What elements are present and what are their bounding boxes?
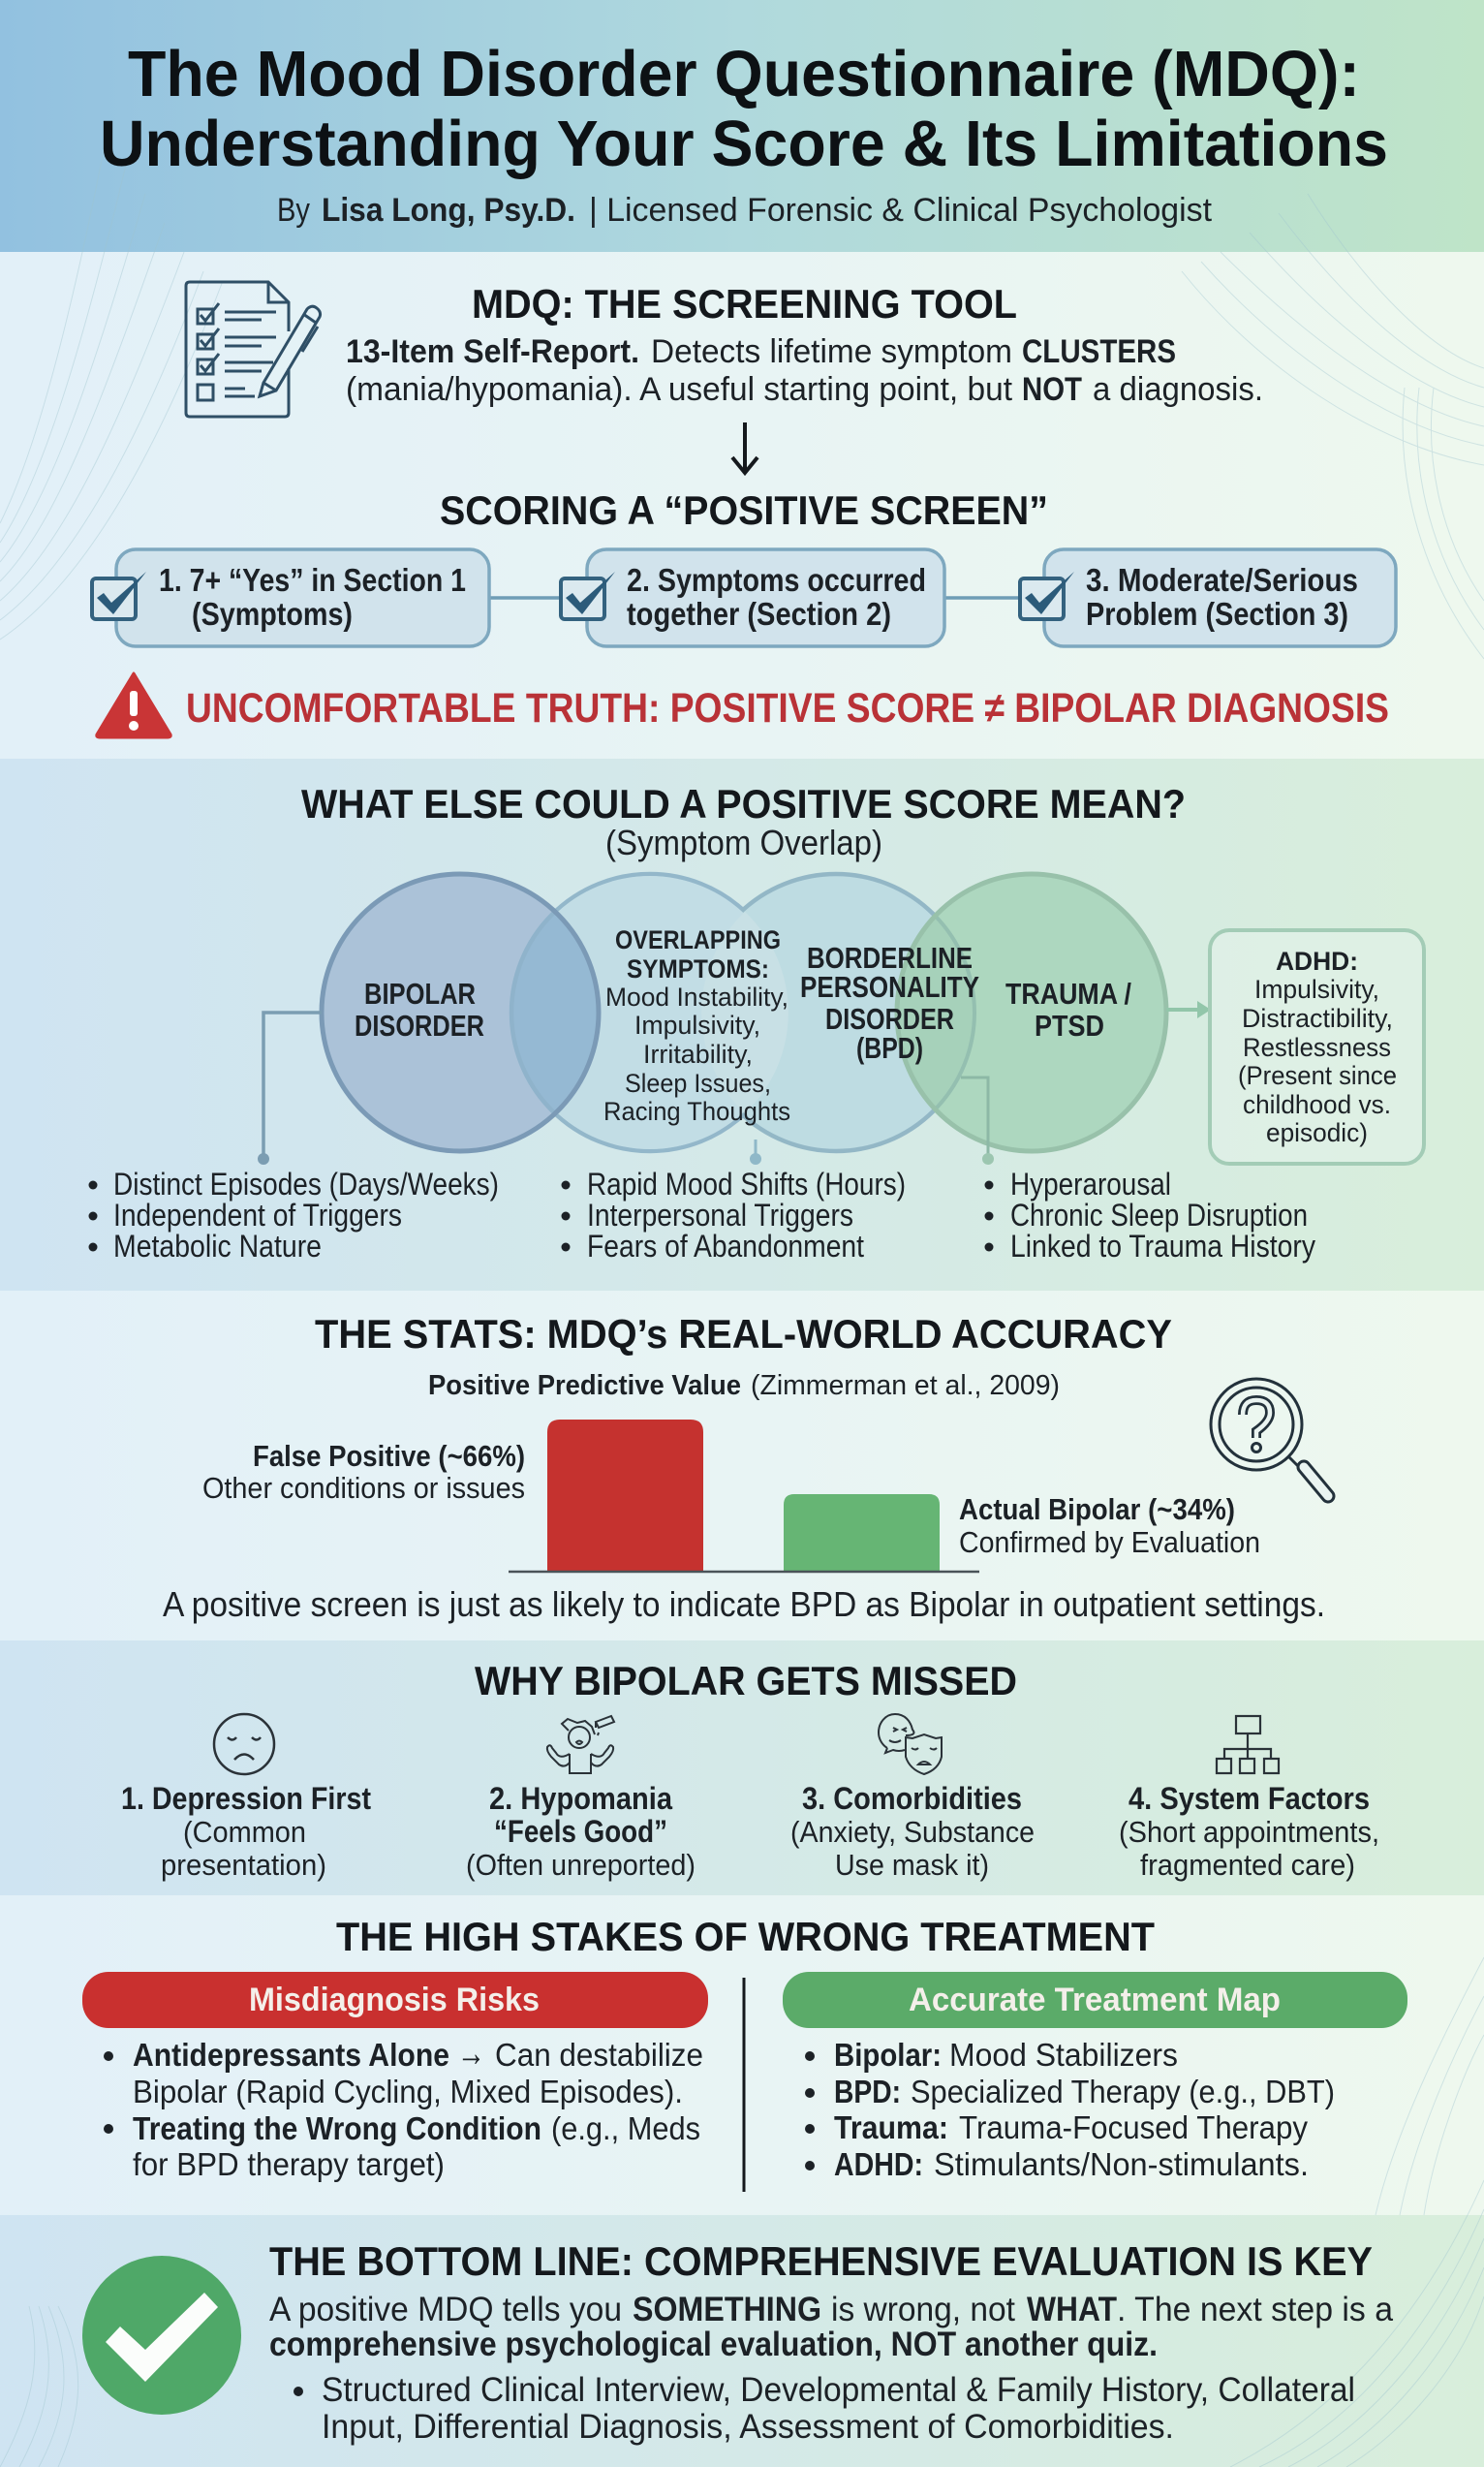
icon: checklist document with pencil <box>186 282 321 417</box>
byline <box>277 192 1213 229</box>
label: actual bipolar: Actual Bipolar (~34%) <box>959 1492 1235 1526</box>
panel: ADHD <box>1210 930 1424 1164</box>
heading: the stats: THE STATS: MDQ’s REAL-WORLD ACCURACY <box>315 1311 1172 1357</box>
reason 1: presentation) <box>161 1848 326 1882</box>
reason 2: 2. Hypomania <box>489 1781 672 1816</box>
reason 2 <box>466 1781 696 1882</box>
scoring steps flow <box>92 549 1396 646</box>
panel: ADHD: Distractibility, <box>1242 1004 1393 1033</box>
byline: | Licensed Forensic & Clinical Psychologist <box>589 192 1213 229</box>
bar: false positive <box>547 1420 703 1572</box>
heading: bottom line: THE BOTTOM LINE: COMPREHENSIVE EVALUATION IS KEY <box>269 2238 1373 2284</box>
text block: screening tool description: (mania/hypomania). A useful starting point, but <box>346 371 1013 408</box>
label: borderline personality disorder <box>800 941 979 1065</box>
panel: misdiagnosis risks: Can destabilize <box>495 2037 703 2073</box>
step 2: 2. Symptoms occurred <box>627 562 926 598</box>
list: evaluation components: Structured Clinical Interview, Developmental & Family History, Collateral <box>322 2371 1355 2409</box>
text block: bottom line: comprehensive psychological evaluation, NOT another quiz. <box>269 2326 1158 2363</box>
label: false positive <box>202 1439 525 1505</box>
reason 1: (Common <box>183 1815 306 1849</box>
step 1 <box>92 549 489 646</box>
panel: accurate treatment map: Bipolar: <box>834 2037 942 2073</box>
label: borderline personality disorder: (BPD) <box>856 1031 923 1065</box>
label: trauma ptsd: TRAUMA / <box>1005 977 1131 1011</box>
panel: ADHD: Impulsivity, <box>1254 975 1379 1004</box>
connectors from circles to bullet lists <box>260 1013 992 1163</box>
label: overlapping symptoms: Mood Instability, <box>605 983 788 1012</box>
text block: screening tool description: NOT <box>1022 371 1082 408</box>
label: false positive: False Positive (~66%) <box>253 1439 525 1473</box>
heading: high stakes: THE HIGH STAKES OF WRONG TREATMENT <box>336 1914 1155 1959</box>
list: trauma traits <box>984 1167 1315 1264</box>
heading: screening tool: MDQ: THE SCREENING TOOL <box>472 281 1017 327</box>
panel: accurate treatment map: Trauma: <box>834 2109 948 2145</box>
reason 4: 4. System Factors <box>1128 1781 1370 1816</box>
text block: screening tool description: a diagnosis. <box>1093 371 1263 408</box>
circle: bipolar <box>320 872 601 1153</box>
bar chart <box>202 1420 1260 1572</box>
panel: ADHD: episodic) <box>1266 1118 1368 1147</box>
panel: misdiagnosis risks: for BPD therapy target) <box>133 2146 445 2182</box>
panel: misdiagnosis risks: Treating the Wrong Condition <box>133 2110 541 2146</box>
label: overlapping symptoms: Racing Thoughts <box>603 1097 790 1126</box>
label: trauma ptsd: PTSD <box>1035 1009 1104 1043</box>
reason 3: (Anxiety, Substance <box>790 1815 1035 1849</box>
icon: sad face <box>214 1714 274 1774</box>
panel: accurate treatment map: Specialized Therapy (e.g., DBT) <box>911 2074 1335 2109</box>
icon: theater masks <box>879 1714 942 1774</box>
venn diagram <box>322 874 1166 1151</box>
panel: ADHD: childhood vs. <box>1243 1090 1391 1119</box>
label: bipolar disorder <box>355 977 484 1043</box>
text block: bottom line: A positive MDQ tells you <box>269 2291 622 2328</box>
label: overlapping symptoms: Impulsivity, <box>634 1011 760 1040</box>
panel: misdiagnosis risks: Antidepressants Alone <box>133 2037 449 2073</box>
list: BPD traits: Fears of Abandonment <box>587 1229 864 1264</box>
step 2: together (Section 2) <box>627 596 891 632</box>
subheading: positive predictive value: (Zimmerman et al., 2009) <box>751 1370 1060 1401</box>
arrow: trauma to ADHD <box>1166 1001 1211 1018</box>
panel: accurate treatment map: Accurate Treatment Map <box>909 1982 1281 2018</box>
text block: bottom line: SOMETHING <box>633 2291 821 2328</box>
icon: warning triangle <box>97 673 170 737</box>
text: positive screen note: A positive screen is just as likely to indicate BPD as Bipolar in outpatient settings. <box>163 1584 1325 1624</box>
reason 2: (Often unreported) <box>466 1848 696 1882</box>
step 3 <box>1020 549 1396 646</box>
circle: trauma <box>895 872 1168 1153</box>
label: borderline personality disorder: DISORDER <box>825 1002 954 1036</box>
list: BPD traits: Interpersonal Triggers <box>587 1198 853 1233</box>
label: trauma ptsd <box>1005 977 1131 1043</box>
label: borderline personality disorder: PERSONALITY <box>800 970 979 1004</box>
panel: accurate treatment map: ADHD: <box>834 2146 923 2182</box>
panel: misdiagnosis risks: Misdiagnosis Risks <box>249 1982 540 2018</box>
reason 1: 1. Depression First <box>121 1781 371 1816</box>
reason 1 <box>121 1781 371 1882</box>
subheading: symptom overlap: (Symptom Overlap) <box>605 823 882 862</box>
label: borderline personality disorder: BORDERLINE <box>807 941 973 975</box>
panel: accurate treatment map: Trauma-Focused Therapy <box>959 2109 1308 2145</box>
reason 4: fragmented care) <box>1140 1848 1355 1882</box>
text block: screening tool description: Detects lifetime symptom <box>651 333 1012 370</box>
circle: overlap and BPD <box>511 874 974 1151</box>
label: false positive: Other conditions or issues <box>202 1471 525 1505</box>
list: BPD traits: Rapid Mood Shifts (Hours) <box>587 1167 906 1202</box>
panel: misdiagnosis risks: Bipolar (Rapid Cycling, Mixed Episodes). <box>133 2074 683 2109</box>
label: overlapping symptoms: Sleep Issues, <box>625 1069 771 1098</box>
text block: screening tool description: 13-Item Self-Report. <box>346 333 639 370</box>
subheading: positive predictive value <box>428 1370 1060 1401</box>
panel: ADHD: ADHD: <box>1276 947 1358 976</box>
list: evaluation components <box>294 2371 1355 2446</box>
step 3: 3. Moderate/Serious <box>1086 562 1358 598</box>
reason 3: 3. Comorbidities <box>802 1781 1022 1816</box>
label: actual bipolar <box>959 1492 1260 1559</box>
icon: magnifying glass with question mark <box>1211 1379 1328 1496</box>
panel: accurate treatment map: BPD: <box>834 2074 901 2109</box>
title: The Mood Disorder Questionnaire (MDQ): <box>128 38 1360 110</box>
reason 3: Use mask it) <box>835 1848 989 1882</box>
reason 2: “Feels Good” <box>494 1814 667 1849</box>
reason 3 <box>790 1781 1035 1882</box>
icon: confused person <box>547 1716 614 1773</box>
list: bipolar traits: Independent of Triggers <box>113 1198 402 1233</box>
list: trauma traits: Linked to Trauma History <box>1010 1229 1315 1264</box>
subheading: positive predictive value: Positive Predictive Value <box>428 1370 741 1401</box>
reason 4: (Short appointments, <box>1119 1815 1379 1849</box>
panel: misdiagnosis risks: → <box>457 2032 485 2075</box>
heading: scoring a positive screen: SCORING A “POSITIVE SCREEN” <box>440 487 1048 533</box>
divider <box>742 1978 746 2192</box>
label: overlapping symptoms: SYMPTOMS: <box>627 954 769 984</box>
list: bipolar traits <box>89 1167 499 1264</box>
panel: misdiagnosis risks <box>82 1972 708 2182</box>
list: BPD traits <box>562 1167 906 1264</box>
byline: By <box>277 192 310 229</box>
text block: screening tool description: CLUSTERS <box>1022 333 1176 370</box>
reason 4 <box>1119 1781 1379 1882</box>
text block: screening tool description <box>346 333 1263 408</box>
panel: screening tool <box>346 281 1263 408</box>
label: bipolar disorder: BIPOLAR <box>364 977 476 1011</box>
label: overlapping symptoms: OVERLAPPING <box>615 925 781 954</box>
label: overlapping symptoms: Irritability, <box>643 1040 753 1069</box>
list: trauma traits: Chronic Sleep Disruption <box>1010 1198 1308 1233</box>
panel: misdiagnosis risks: (e.g., Meds <box>551 2110 700 2146</box>
text block: bottom line <box>269 2291 1394 2363</box>
title <box>100 38 1388 180</box>
icon: green check circle <box>82 2256 241 2415</box>
byline: Lisa Long, Psy.D. <box>322 192 575 229</box>
text block: bottom line: WHAT <box>1027 2291 1117 2328</box>
heading: what else could a positive score mean: WHAT ELSE COULD A POSITIVE SCORE MEAN? <box>301 781 1186 827</box>
bar: actual bipolar <box>784 1494 940 1572</box>
label: overlapping symptoms <box>603 925 790 1126</box>
text block: bottom line: is wrong, not <box>831 2291 1015 2328</box>
list: evaluation components: Input, Differential Diagnosis, Assessment of Comorbidities. <box>322 2408 1174 2446</box>
step 1: (Symptoms) <box>192 596 353 632</box>
title: Understanding Your Score & Its Limitations <box>100 108 1388 180</box>
text block: bottom line: . The next step is a <box>1117 2291 1394 2328</box>
label: bipolar disorder: DISORDER <box>355 1009 484 1043</box>
label: actual bipolar: Confirmed by Evaluation <box>959 1525 1260 1559</box>
step 1: 1. 7+ “Yes” in Section 1 <box>159 562 466 598</box>
panel: ADHD: Restlessness <box>1243 1033 1391 1062</box>
step 2 <box>561 549 944 646</box>
list: trauma traits: Hyperarousal <box>1010 1167 1171 1202</box>
list: bipolar traits: Metabolic Nature <box>113 1229 322 1264</box>
panel: accurate treatment map <box>783 1972 1407 2182</box>
icon: hierarchy chart <box>1217 1716 1279 1773</box>
panel: ADHD: (Present since <box>1238 1061 1397 1090</box>
arrow: down to scoring <box>732 422 757 473</box>
heading: why bipolar gets missed: WHY BIPOLAR GETS MISSED <box>475 1658 1017 1703</box>
step 3: Problem (Section 3) <box>1086 596 1348 632</box>
list: bipolar traits: Distinct Episodes (Days/Weeks) <box>113 1167 499 1202</box>
panel: accurate treatment map: Mood Stabilizers <box>949 2037 1178 2073</box>
panel: accurate treatment map: Stimulants/Non-stimulants. <box>934 2146 1309 2182</box>
